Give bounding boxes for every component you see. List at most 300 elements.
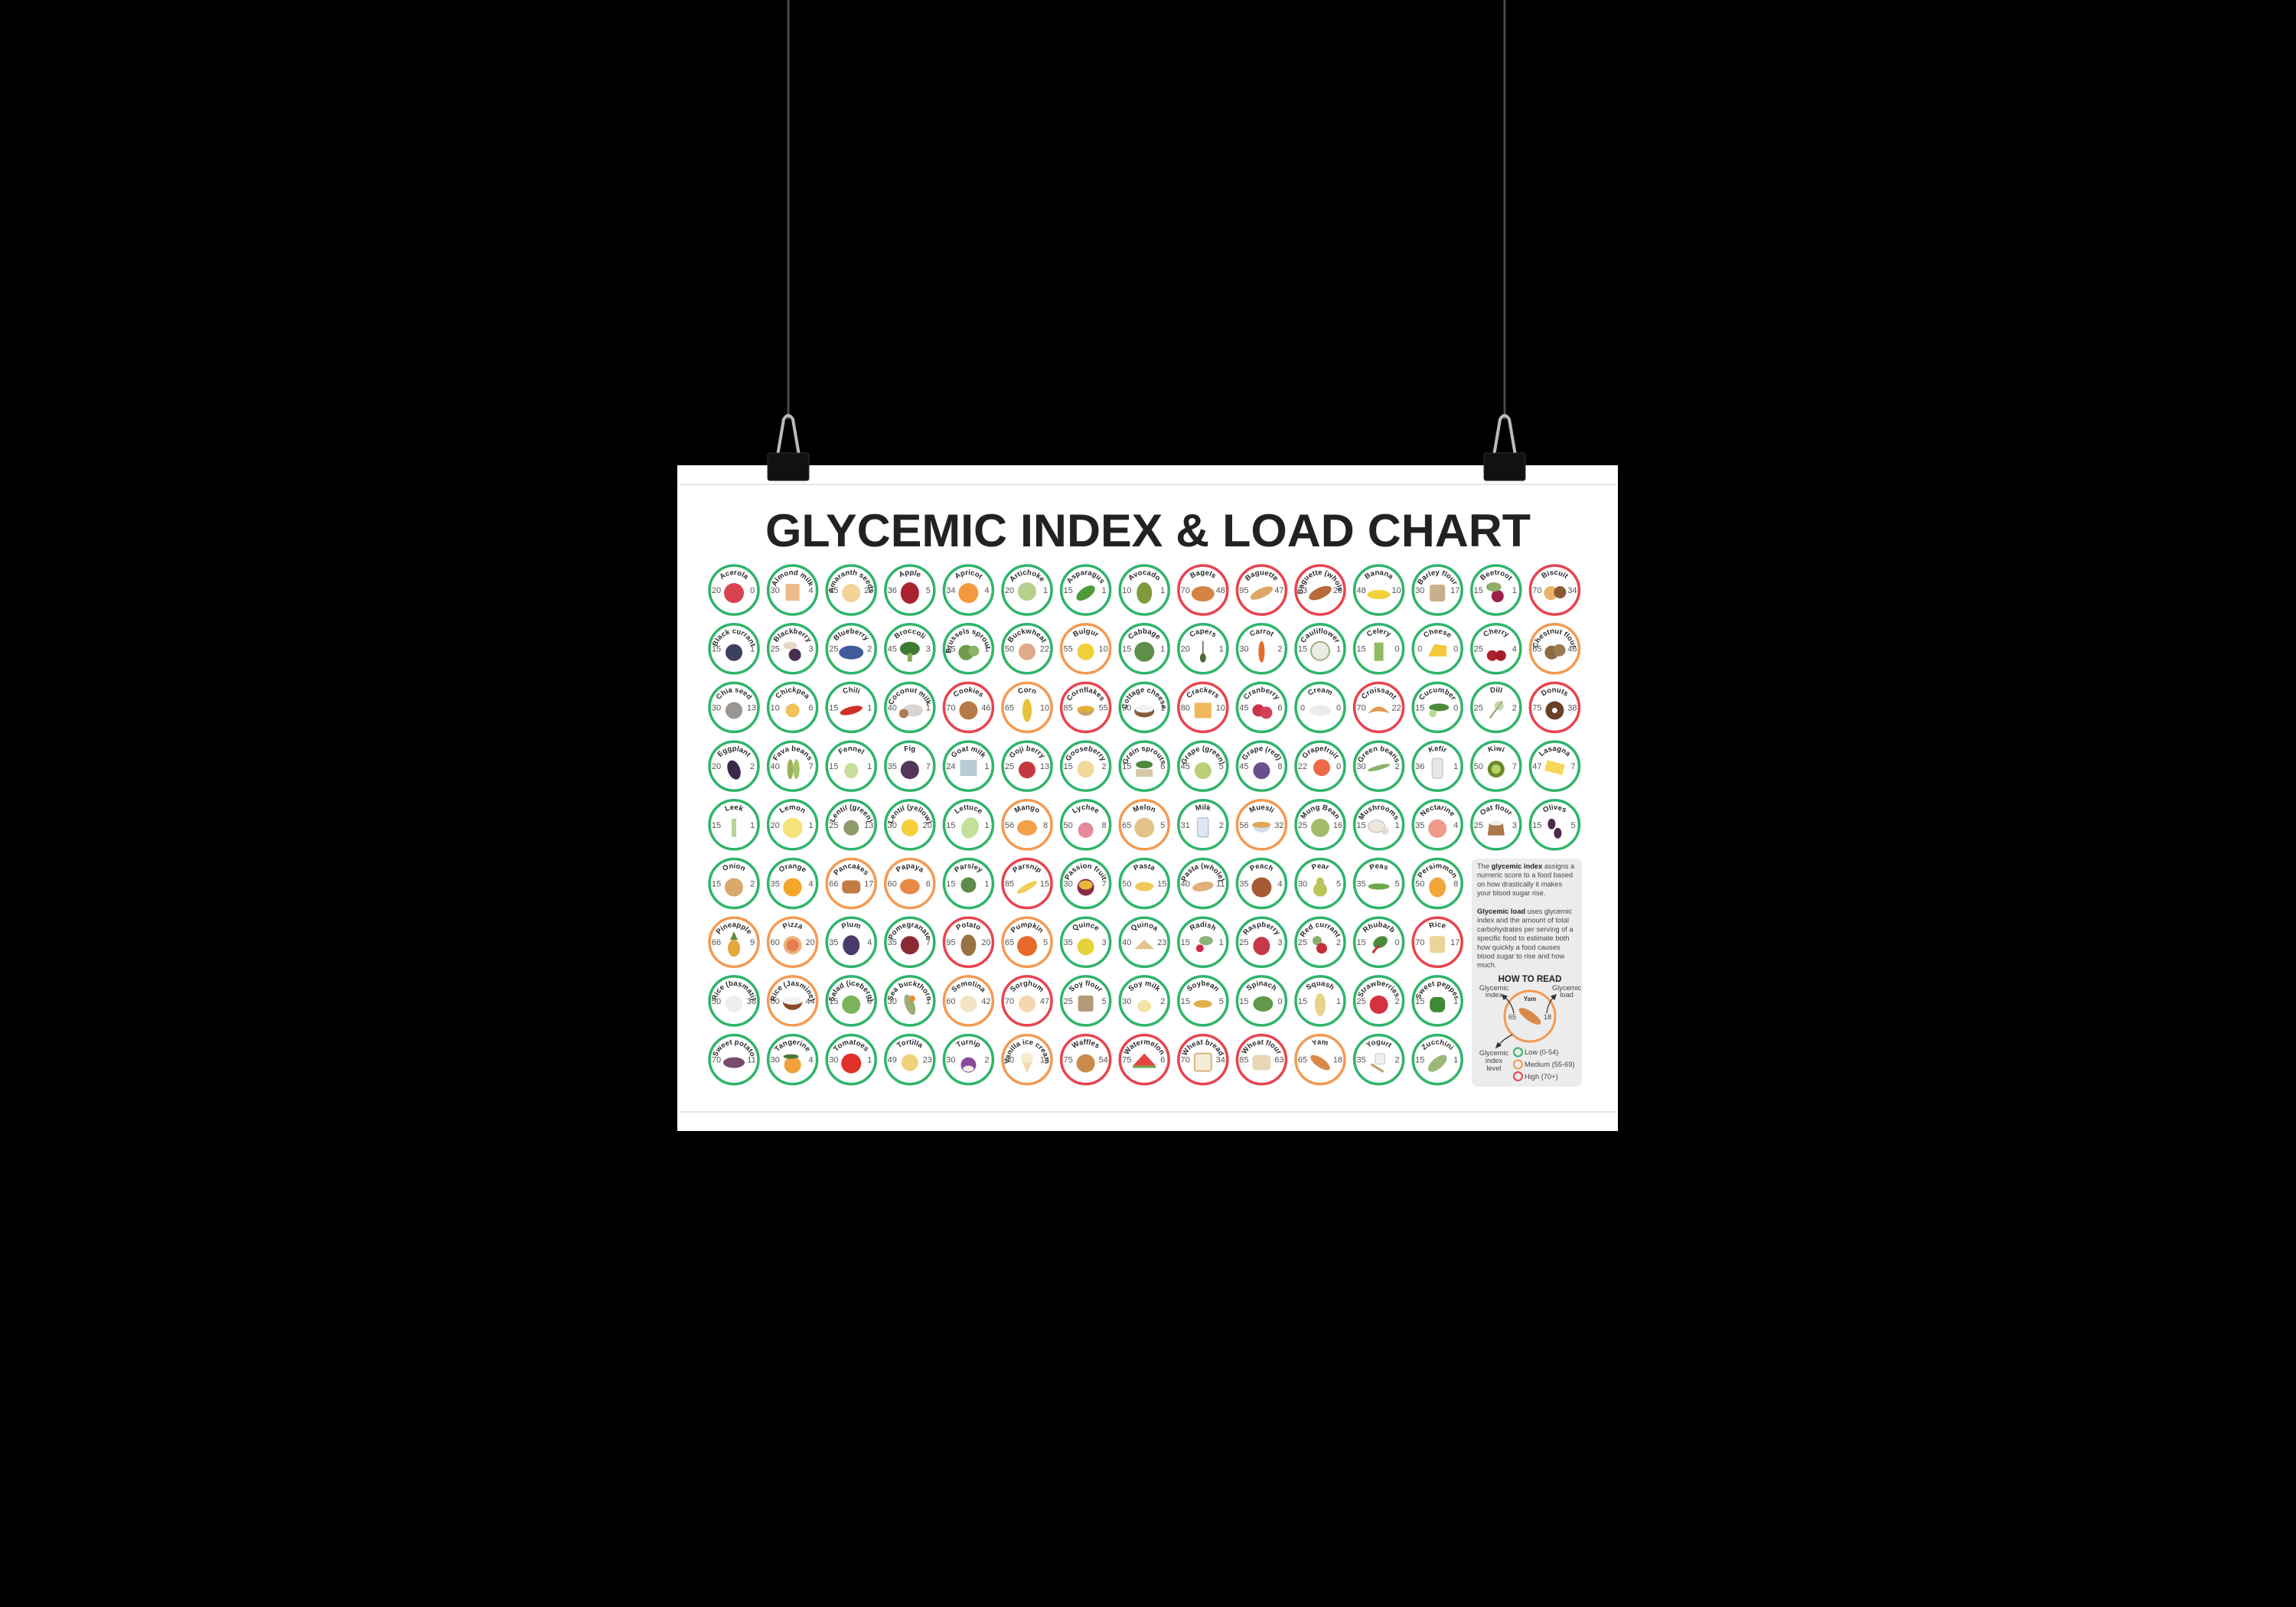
- circle: Soy milk: 30: [1122, 997, 1131, 1006]
- circle: Wheat bread: [1179, 1035, 1228, 1084]
- circle: Biscuit: [1529, 564, 1581, 616]
- circle: Kiwi: 7: [1512, 762, 1517, 771]
- circle: Goat milk: 1: [984, 762, 989, 771]
- circle: Onion: 2: [750, 880, 755, 889]
- circle: Cranberry: [1237, 683, 1286, 732]
- circle: Cabbage: [1118, 623, 1170, 675]
- circle: Sorghum: 47: [1040, 997, 1049, 1006]
- diagram: yam example: [1505, 991, 1555, 1041]
- circle: Chili: Chili: [843, 687, 860, 693]
- circle: Sweet pepper: 1: [1453, 997, 1458, 1006]
- circle: Crackers: 80: [1181, 703, 1190, 712]
- circle: Cottage cheese: Cottage cheese: [1122, 688, 1166, 709]
- circle: Amaranth seeds: Amaranth seeds: [828, 569, 874, 593]
- label: glycemic index level: index: [1486, 1057, 1502, 1064]
- circle: Wheat flour: [1237, 1035, 1286, 1084]
- circle: Pumpkin: [1003, 918, 1052, 966]
- circle: Chestnut flour: 46: [1567, 645, 1577, 654]
- circle: Lasagna: [1530, 742, 1579, 790]
- circle: Parsley: 1: [984, 880, 989, 889]
- circle: Chestnut flour: Chestnut flour: [1532, 629, 1577, 647]
- circle: Sweet potato: 70: [712, 1056, 721, 1065]
- circle: Chestnut flour: [1529, 623, 1581, 675]
- circle: Pancakes: [827, 859, 876, 908]
- text: glycemic index definition: your blood sugar rise.: [1477, 889, 1545, 897]
- circle: Blackberry: Blackberry: [773, 627, 811, 642]
- circle: Kiwi: 50: [1474, 762, 1483, 771]
- circle: Bulgur: 55: [1063, 645, 1073, 654]
- circle: Pizza: 20: [805, 938, 815, 947]
- circle: Gooseberry: 2: [1102, 762, 1107, 771]
- circle: Gooseberry: Gooseberry: [1064, 745, 1107, 763]
- circle: Rice (Jasmine): 60: [770, 997, 780, 1006]
- circle: Cauliflower: Cauliflower: [1301, 627, 1339, 643]
- circle: Soybean: 15: [1181, 997, 1190, 1006]
- circle: Radish: 15: [1181, 938, 1190, 947]
- circle: Vanilla ice cream: 60: [1005, 1056, 1014, 1065]
- circle: Passion fruit: 7: [1102, 880, 1107, 889]
- circle: Soy flour: [1062, 976, 1110, 1025]
- key: low medium high: High (70+): [1525, 1073, 1558, 1081]
- circle: Passion fruit: 30: [1063, 880, 1073, 889]
- circle: Orange: 4: [809, 880, 814, 889]
- circle: Amaranth seeds: 35: [829, 586, 838, 595]
- circle: Parsley: Parsley: [953, 862, 984, 875]
- circle: Muesli: 32: [1274, 821, 1284, 830]
- circle: Biscuit: 70: [1532, 586, 1542, 595]
- circle: Cheese: Cheese: [1424, 629, 1451, 637]
- circle: Pomegranate: 35: [888, 938, 897, 947]
- circle: Crackers: [1179, 683, 1228, 732]
- circle: Turnip: Turnip: [955, 1038, 982, 1050]
- circle: Fava beans: 40: [770, 762, 780, 771]
- circle: Eggplant: 2: [750, 762, 755, 771]
- circle: Cherry: Cherry: [1483, 629, 1509, 637]
- circle: Fennel: Fennel: [837, 745, 866, 756]
- circle: Acerola: 20: [712, 586, 721, 595]
- circle: Cranberry: Cranberry: [1244, 687, 1280, 699]
- circle: Soybean: [1179, 976, 1228, 1025]
- circle: Sweet pepper: 15: [1415, 997, 1424, 1006]
- circle: Vanilla ice cream: Vanilla ice cream: [1003, 1038, 1051, 1064]
- circle: Papaya: [885, 859, 934, 908]
- circle: Pizza: Pizza: [781, 921, 804, 931]
- circle: Strawberries: [1355, 976, 1404, 1025]
- circle: Baguette (whole): [1294, 564, 1346, 616]
- circle: Lychee: Lychee: [1071, 804, 1101, 816]
- circle: Mango: [1003, 800, 1052, 849]
- circle: Blueberry: Blueberry: [833, 627, 869, 641]
- circle: Artichoke: 20: [1005, 586, 1014, 595]
- circle: Tangerine: 4: [809, 1056, 814, 1065]
- circle: Beetroot: 1: [1512, 586, 1517, 595]
- circle: Cottage cheese: [1120, 683, 1169, 732]
- circle: Fennel: 1: [867, 762, 872, 771]
- circle: Grapefruit: 0: [1336, 762, 1341, 771]
- circle: Black currant: [708, 623, 760, 675]
- circle: Pear: [1296, 859, 1345, 908]
- circle: Apple: Apple: [900, 570, 920, 577]
- circle: Fennel: [827, 742, 876, 790]
- circle: Goji berry: 13: [1040, 762, 1049, 771]
- circle: Fava beans: Fava beans: [771, 745, 814, 762]
- circle: Biscuit: Biscuit: [1541, 571, 1568, 579]
- circle: Strawberries: 2: [1395, 997, 1400, 1006]
- circle: Soy milk: [1120, 976, 1169, 1025]
- circle: Cream: 0: [1336, 703, 1341, 712]
- circle: Cottage cheese: 1: [1160, 703, 1165, 712]
- circle: Melon: Melon: [1132, 804, 1157, 814]
- circle: Mango: 8: [1043, 821, 1048, 830]
- circle: Semolina: 42: [981, 997, 991, 1006]
- circle: Bulgur: [1059, 623, 1111, 675]
- circle: Lettuce: 1: [984, 821, 989, 830]
- circle: Yogurt: 35: [1356, 1056, 1366, 1065]
- circle: Goat milk: Goat milk: [950, 745, 988, 760]
- circle: Asparagus: 15: [1063, 586, 1073, 595]
- circle: Mung Bean: 25: [1298, 821, 1307, 830]
- text: glycemic load definition: how quickly a food causes: [1477, 944, 1561, 951]
- circle: Avocado: [1118, 564, 1170, 616]
- circle: Barley flour: 30: [1415, 586, 1424, 595]
- circle: Tangerine: [768, 1035, 817, 1084]
- circle: Mushrooms: [1355, 800, 1404, 849]
- circle: Salad (iceberg): 0: [867, 997, 872, 1006]
- circle: Semolina: Semolina: [950, 980, 987, 995]
- circle: Red currant: [1296, 918, 1345, 966]
- circle: Nectarine: 35: [1415, 821, 1424, 830]
- circle: Dill: 25: [1474, 703, 1483, 712]
- circle: Pizza: 60: [770, 938, 780, 947]
- circle: Parsnip: 15: [1040, 880, 1049, 889]
- circle: Plum: Plum: [840, 921, 862, 931]
- circle: Lentil (green): [827, 800, 876, 849]
- circle: Raspberry: Raspberry: [1241, 921, 1282, 937]
- circle: Green beans: 2: [1395, 762, 1400, 771]
- circle: Grain sprouts: Grain sprouts: [1121, 745, 1167, 765]
- text: glycemic load definition: much.: [1477, 961, 1496, 969]
- circle: Milk: 31: [1181, 821, 1190, 830]
- circle: Salad (iceberg): Salad (iceberg): [827, 980, 875, 1002]
- circle: Brussels sprouts: 15: [946, 645, 956, 654]
- circle: Tortilla: [885, 1035, 934, 1084]
- circle: Tortilla: 49: [888, 1056, 897, 1065]
- circle: Chestnut flour: 65: [1532, 645, 1542, 654]
- circle: Black currant: Black currant: [712, 629, 755, 647]
- food grid: [708, 564, 1581, 1085]
- circle: Plum: 4: [867, 938, 872, 947]
- circle: Fava beans: 7: [809, 762, 814, 771]
- circle: Radish: Radish: [1189, 921, 1218, 933]
- circle: Acerola: Acerola: [720, 571, 748, 580]
- circle: Broccoli: Broccoli: [894, 629, 926, 639]
- circle: Melon: 65: [1122, 821, 1131, 830]
- circle: Acerola: [708, 564, 760, 616]
- circle: Blueberry: 25: [829, 645, 838, 654]
- circle: Pumpkin: Pumpkin: [1009, 921, 1045, 935]
- circle: Watermelon: 6: [1160, 1056, 1165, 1065]
- circle: Carrot: 30: [1239, 645, 1249, 654]
- circle: Yam: 65: [1298, 1056, 1307, 1065]
- circle: Almond milk: 4: [809, 586, 814, 595]
- circle: Peas: 5: [1395, 880, 1400, 889]
- circle: Cucumber: Cucumber: [1417, 686, 1458, 702]
- circle: Almond milk: [767, 564, 819, 616]
- circle: Banana: 48: [1356, 586, 1366, 595]
- circle: Soy flour: 5: [1102, 997, 1107, 1006]
- circle: Bagels: Bagels: [1189, 571, 1215, 579]
- circle: Kefir: Kefir: [1427, 745, 1448, 755]
- circle: Beetroot: 15: [1474, 586, 1483, 595]
- circle: Cherry: [1470, 623, 1522, 675]
- circle: Cookies: [944, 683, 993, 732]
- circle: Croissant: [1355, 683, 1404, 732]
- circle: Tangerine: Tangerine: [773, 1038, 812, 1054]
- circle: Peas: 35: [1356, 880, 1366, 889]
- circle: Biscuit: 34: [1567, 586, 1577, 595]
- circle: Red currant: 25: [1298, 938, 1307, 947]
- circle: Bulgur: Bulgur: [1073, 627, 1099, 637]
- circle: Kefir: [1413, 742, 1462, 790]
- circle: Grape (green): 45: [1181, 762, 1190, 771]
- text: glycemic index definition: on how drastically it makes: [1477, 880, 1562, 888]
- circle: Barley flour: [1411, 564, 1463, 616]
- circle: Vanilla ice cream: 14: [1040, 1056, 1049, 1065]
- circle: Baguette (whole): Baguette (whole): [1297, 570, 1342, 594]
- circle: Cornflakes: 85: [1063, 703, 1073, 712]
- circle: Quince: [1062, 918, 1110, 966]
- circle: Oat flour: [1472, 800, 1521, 849]
- circle: Cauliflower: 15: [1298, 645, 1307, 654]
- circle: Raspberry: 3: [1277, 938, 1282, 947]
- circle: Turnip: [944, 1035, 993, 1084]
- circle: Rice (basmati): [709, 976, 758, 1025]
- circle: Pasta (whole): [1179, 859, 1228, 908]
- circle: Rhubarb: 0: [1395, 938, 1400, 947]
- circle: Carrot: 2: [1277, 645, 1282, 654]
- circle: Milk: 2: [1219, 821, 1224, 830]
- circle: Fava beans: [768, 742, 817, 790]
- circle: Kiwi: Kiwi: [1487, 745, 1505, 755]
- label: glycemic index: index: [1486, 991, 1502, 999]
- circle: Wheat flour: Wheat flour: [1241, 1038, 1283, 1056]
- circle: Barley flour: 17: [1450, 586, 1459, 595]
- circle: Grape (red): 8: [1277, 762, 1282, 771]
- circle: Soy flour: Soy flour: [1068, 980, 1104, 994]
- circle: Blueberry: [825, 623, 877, 675]
- circle: Cherry: 4: [1512, 645, 1517, 654]
- circle: Sorghum: [1003, 976, 1052, 1025]
- circle: Bagels: [1177, 564, 1229, 616]
- circle: Chickpea: [767, 681, 819, 733]
- circle: Persimmon: 8: [1453, 880, 1458, 889]
- circle: Apricot: 34: [946, 586, 956, 595]
- circle: Apricot: Apricot: [955, 569, 983, 579]
- circle: Mung Bean: 16: [1333, 821, 1342, 830]
- circle: Lentil (green): 13: [864, 821, 873, 830]
- circle: Pineapple: Pineapple: [715, 921, 753, 936]
- circle: Peach: 4: [1277, 880, 1282, 889]
- circle: Grapefruit: 22: [1298, 762, 1307, 771]
- circle: Buckwheat: Buckwheat: [1007, 629, 1047, 643]
- circle: Rhubarb: Rhubarb: [1362, 921, 1397, 934]
- circle: Sweet pepper: [1413, 976, 1462, 1025]
- circle: Passion fruit: Passion fruit: [1063, 862, 1108, 882]
- circle: Peach: [1237, 859, 1286, 908]
- circle: Lemon: 20: [770, 821, 780, 830]
- circle: Cream: [1296, 683, 1345, 732]
- circle: Broccoli: [884, 623, 936, 675]
- circle: Orange: Orange: [778, 862, 808, 875]
- circle: Donuts: Donuts: [1540, 686, 1570, 698]
- circle: Chickpea: 6: [809, 703, 814, 712]
- circle: Cheese: [1411, 623, 1463, 675]
- circle: Cookies: 70: [946, 703, 956, 712]
- circle: Milk: [1179, 800, 1228, 849]
- circle: Tortilla: 23: [923, 1056, 932, 1065]
- circle: Peach: 35: [1239, 880, 1249, 889]
- circle: Fennel: 15: [829, 762, 838, 771]
- arrows: diagram pointers: [1496, 995, 1556, 1048]
- circle: Coconut milk: 1: [926, 703, 931, 712]
- circle: Pancakes: Pancakes: [832, 862, 870, 877]
- circle: Zucchini: 15: [1415, 1056, 1424, 1065]
- circle: Red currant: 2: [1336, 938, 1341, 947]
- circle: Carrot: Carrot: [1250, 629, 1274, 637]
- circle: Chia seed: 13: [747, 703, 756, 712]
- circle: Pasta (whole): 11: [1216, 880, 1225, 889]
- clip right: [1484, 416, 1525, 481]
- circle: Croissant: 22: [1391, 703, 1401, 712]
- clip left: [768, 416, 809, 481]
- circle: Raspberry: [1237, 918, 1286, 966]
- circle: Kefir: 36: [1415, 762, 1424, 771]
- circle: Grape (green): [1179, 742, 1228, 790]
- circle: Parsnip: 85: [1005, 880, 1014, 889]
- circle: Chia seed: 30: [712, 703, 721, 712]
- circle: Celery: Celery: [1367, 627, 1391, 637]
- circle: Pancakes: 66: [829, 880, 838, 889]
- circle: Blackberry: 25: [770, 645, 780, 654]
- circle: Cucumber: 0: [1453, 703, 1458, 712]
- circle: Capers: [1177, 623, 1229, 675]
- circle: Spinach: 0: [1277, 997, 1282, 1006]
- circle: Lychee: 50: [1063, 821, 1073, 830]
- circle: Artichoke: [1001, 564, 1053, 616]
- circle: Soybean: 5: [1219, 997, 1224, 1006]
- circle: Artichoke: Artichoke: [1010, 569, 1044, 582]
- circle: Fig: [885, 742, 934, 790]
- circle: Persimmon: Persimmon: [1416, 862, 1459, 879]
- circle: Pasta: 15: [1157, 880, 1166, 889]
- circle: Sorghum: 70: [1005, 997, 1014, 1006]
- circle: Avocado: Avocado: [1129, 571, 1160, 581]
- circle: Pasta: [1120, 859, 1169, 908]
- circle: Mushrooms: 1: [1395, 821, 1400, 830]
- circle: Cauliflower: [1294, 623, 1346, 675]
- circle: Donuts: 38: [1567, 703, 1577, 712]
- circle: Black currant: 15: [712, 645, 721, 654]
- circle: Rice (Jasmine): Rice (Jasmine): [769, 980, 816, 1002]
- circle: Buckwheat: [1001, 623, 1053, 675]
- circle: Olives: [1530, 800, 1579, 849]
- circle: Quince: 35: [1063, 938, 1073, 947]
- text: glycemic load definition: blood sugar to rise and how: [1477, 952, 1565, 960]
- circle: Yam: [1296, 1035, 1345, 1084]
- poster: [677, 465, 1618, 1131]
- circle: Coconut milk: [885, 683, 934, 732]
- circle: Soy milk: Soy milk: [1127, 980, 1163, 993]
- circle: Brussels sprouts: 1: [984, 645, 989, 654]
- circle: Chickpea: 10: [770, 703, 780, 712]
- circle: Squash: Squash: [1305, 980, 1336, 992]
- circle: Donuts: 75: [1532, 703, 1542, 712]
- circle: Squash: [1296, 976, 1345, 1025]
- circle: Croissant: Croissant: [1360, 686, 1398, 702]
- circle: Squash: 15: [1298, 997, 1307, 1006]
- circle: Yogurt: [1355, 1035, 1404, 1084]
- circle: Barley flour: Barley flour: [1417, 571, 1457, 585]
- text: glycemic load definition: specific food to estimate both: [1477, 934, 1569, 942]
- circle: Baguette: [1235, 564, 1287, 616]
- circle: Brussels sprouts: Brussels sprouts: [946, 629, 990, 654]
- circle: Sea buckthorn: 1: [926, 997, 931, 1006]
- circle: Melon: 5: [1160, 821, 1165, 830]
- circle: Soy milk: 2: [1160, 997, 1165, 1006]
- circle: Parsnip: [1003, 859, 1052, 908]
- label: glycemic load: Glycemic: [1552, 984, 1581, 992]
- key: low medium high: Low (0-54): [1525, 1048, 1558, 1056]
- circle: Grapefruit: [1296, 742, 1345, 790]
- circle: Goji berry: [1003, 742, 1052, 790]
- circle: Grape (red): Grape (red): [1241, 745, 1283, 762]
- circle: Pasta (whole): Pasta (whole): [1180, 862, 1226, 882]
- hanging wire right: [1503, 0, 1506, 419]
- circle: Nectarine: 4: [1453, 821, 1458, 830]
- circle: Corn: 10: [1040, 703, 1049, 712]
- circle: Vanilla ice cream: [1003, 1035, 1052, 1084]
- circle: Watermelon: 75: [1122, 1056, 1131, 1065]
- circle: Grape (green): Grape (green): [1180, 745, 1226, 765]
- circle: Lasagna: 7: [1570, 762, 1575, 771]
- text: glycemic load definition: Glycemic load uses glycemic: [1477, 908, 1572, 915]
- circle: Wheat flour: 63: [1274, 1056, 1284, 1065]
- circle: Plum: 35: [829, 938, 838, 947]
- circle: Pumpkin: 5: [1043, 938, 1048, 947]
- circle: Tomatoes: 1: [867, 1056, 872, 1065]
- circle: Lentil (yellow): 30: [888, 821, 897, 830]
- circle: Quinoa: [1120, 918, 1169, 966]
- circle: Pasta: Pasta: [1133, 862, 1156, 873]
- circle: Cucumber: [1413, 683, 1462, 732]
- circle: Grape (red): [1237, 742, 1286, 790]
- circle: Pasta: 50: [1122, 880, 1131, 889]
- circle: Spinach: [1237, 976, 1286, 1025]
- circle: Bagels: 70: [1181, 586, 1190, 595]
- circle: Fig: Fig: [903, 745, 916, 754]
- circle: Baguette: Baguette: [1244, 571, 1277, 581]
- circle: Blueberry: 2: [867, 645, 872, 654]
- circle: Waffles: Waffles: [1071, 1038, 1101, 1051]
- circle: Grape (red): 45: [1239, 762, 1249, 771]
- circle: Amaranth seeds: [825, 564, 877, 616]
- circle: Mango: Mango: [1013, 804, 1042, 815]
- circle: Corn: [1003, 683, 1052, 732]
- circle: Cheese: 0: [1417, 645, 1422, 654]
- circle: Potato: 95: [946, 938, 956, 947]
- key: low medium high: Medium (55-69): [1525, 1061, 1575, 1068]
- circle: Salad (iceberg): [827, 976, 876, 1025]
